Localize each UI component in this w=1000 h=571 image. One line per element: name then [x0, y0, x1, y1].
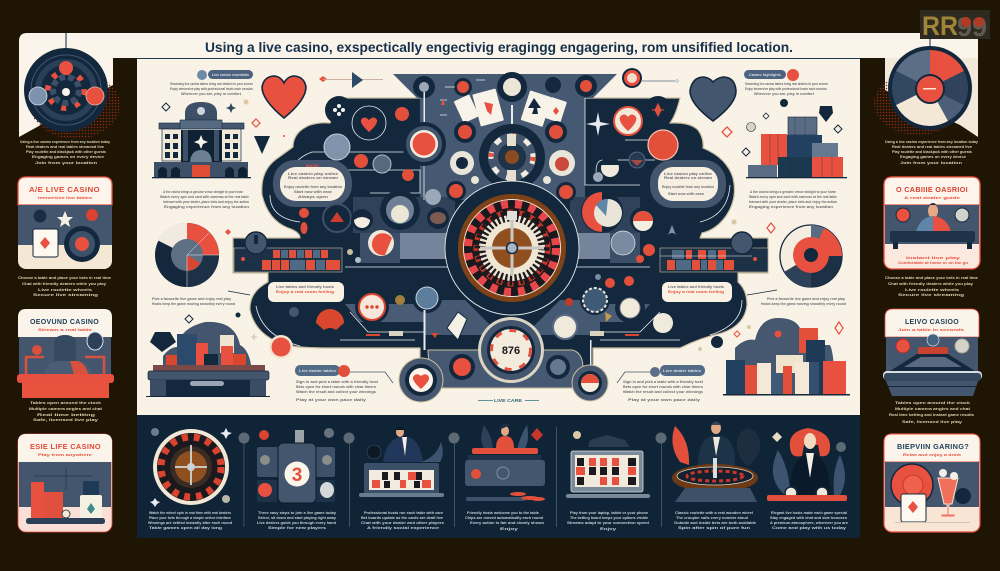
pointer and text right lower: Pick a favourite live game and enjoy real play — [767, 297, 845, 301]
text block right mid: Watch every spin and card with cameras at the real table — [749, 195, 837, 199]
sidebar text: top right: Real dealers and real tables streamed live — [892, 145, 972, 149]
strip captions: Enjoy — [500, 527, 518, 531]
right chip table — [660, 232, 768, 272]
top right pill, heart, node line: Wherever you are, play in comfort — [754, 92, 815, 96]
left text bubble — [273, 160, 352, 207]
sidebar text: right 1 caption — [885, 276, 978, 297]
arrow line — [319, 72, 383, 88]
lower board icons: Live tables and friendly hosts — [276, 285, 334, 289]
sparkles right lower — [698, 322, 843, 351]
lower board icons: Enjoy a real room feeling — [668, 290, 724, 294]
card: left 2 — [17, 309, 114, 398]
slate center panel — [345, 74, 650, 388]
main roulette wheel — [445, 181, 579, 315]
red heart — [262, 76, 306, 118]
top left pill and text: Wherever you are, play in comfort — [181, 92, 242, 96]
bottom navy strip — [137, 415, 860, 538]
header band — [19, 33, 978, 137]
sidebar text: right 2 caption: Tables open around the clock — [895, 401, 970, 405]
top right pill, heart, node line — [622, 68, 828, 121]
sparkles left — [162, 100, 285, 235]
left text bubble: Start now with ease — [294, 190, 332, 194]
sidebar text: top right: Engaging games on every device — [900, 155, 966, 159]
left cloud icons — [324, 96, 414, 181]
lower board icons — [268, 282, 732, 350]
strip captions: Friendly hosts welcome you to the table — [467, 511, 539, 515]
bottom caption: live care: LIVE CARE — [494, 398, 522, 403]
lower left pill and text: Play at your own pace daily — [296, 398, 366, 402]
navy track lines — [256, 98, 742, 346]
text block left mid: A live casino brings a genuine venue straight to your home — [163, 190, 243, 194]
strip captions: Every action is fair and clearly shown — [470, 521, 544, 525]
sidebar text: right 2 caption: Safe, licensed live play — [902, 420, 962, 424]
card: left 3: Play from anywhere — [38, 453, 92, 457]
text block right mid: Interact with your dealer, place bets and enjoy the action — [749, 200, 837, 204]
card: right 1: Instant live play — [906, 256, 960, 260]
card: right 3 — [884, 434, 980, 532]
main board silhouette — [233, 98, 768, 388]
sidebar text: left 1 caption: Live roulette wheels — [38, 288, 92, 292]
strip item: laptop — [566, 431, 650, 498]
sidebar text: right 2 caption: Real time betting and instant game results — [889, 413, 974, 417]
sidebar text: left 1 caption: Secure live streaming — [33, 293, 98, 297]
lower left pill and text: Watch the result and collect your winnings — [296, 390, 376, 394]
strip item: roulette table and host — [672, 422, 782, 502]
text block left mid: Engaging experience from any location — [164, 205, 249, 209]
chip blocks right top — [746, 117, 847, 178]
strip captions: Select, sit down and start playing right away — [258, 516, 336, 520]
card title: OEOVUND CASINO — [30, 319, 99, 326]
left wheel: chip dial — [24, 33, 120, 139]
sidebar text: right 2 caption — [889, 401, 974, 424]
top right pill, heart, node line: Streaming live casino tables bring real dealers to your screen — [745, 82, 828, 86]
sidebar text: right 2 caption: Multiple camera angles and chat — [895, 407, 971, 411]
main cream panel — [137, 59, 860, 415]
sidebar text: left 2 caption: Multiple camera angles and chat — [29, 407, 103, 411]
pointer and text right lower — [747, 290, 846, 306]
left text bubble: Real dealers on stream — [288, 176, 338, 180]
base nodes — [449, 354, 570, 380]
left text bubble: Enjoy roulette from any location — [284, 185, 342, 189]
top left pill and text: Live casino essentials — [212, 73, 249, 77]
card title: O CABIIIE OASRIOI — [896, 187, 968, 194]
text block left mid — [160, 190, 249, 209]
strip captions: Spin after spin of pure fun — [678, 526, 750, 530]
strip captions: Live dealers guide you through every hand — [257, 521, 336, 525]
strip item: dealer and board — [359, 426, 444, 497]
right mid icons — [581, 191, 686, 288]
center chip: 876 — [502, 345, 520, 357]
card: left 1 — [18, 177, 112, 269]
left text bubble: Always open — [298, 195, 328, 199]
card: right 1: Comfortable at home or on the go — [898, 261, 968, 265]
left chip table — [234, 232, 342, 272]
left text bubble: Live casino play online — [288, 172, 338, 176]
strip captions: Classic roulette with a real wooden wheel — [675, 511, 753, 515]
sidebar text: top right: Join from your location — [900, 161, 962, 165]
sidebar text: right 1 caption: Live roulette wheels — [905, 288, 959, 292]
left text bubble: BASE — [306, 164, 319, 168]
strip captions: Outside and inside bets are both available — [674, 521, 756, 525]
strip captions: The croupier calls every number aloud — [676, 516, 748, 520]
lower left pill and text: Bets open for short rounds with clear timers — [296, 385, 376, 389]
top right pill, heart, node line: Casino highlights — [749, 73, 781, 77]
text block right mid: A live casino brings a genuine venue straight to your home — [750, 190, 836, 194]
strip captions: Professional hosts run each table with care — [364, 511, 443, 515]
strip captions: A premium atmosphere, wherever you are — [770, 521, 848, 525]
text block left mid: Watch every spin and card with cameras at the real table — [160, 195, 249, 199]
strip item: red-haired woman — [767, 428, 847, 501]
watermark: RR99: RR — [922, 11, 958, 41]
text block right mid — [749, 190, 837, 209]
sparkles right top — [722, 99, 842, 233]
strip captions: Simple for new players — [268, 526, 326, 530]
strip captions: Come and play with us today — [772, 526, 846, 530]
right text bubble: Live casino play online — [664, 172, 712, 176]
left mid icons — [299, 189, 449, 263]
strip captions: Place your bets through a simple online interface — [149, 516, 231, 520]
strip captions: Chat with your dealer and other players — [361, 521, 444, 525]
sidebar text: left 2 caption: Real time betting — [37, 413, 95, 417]
flag node — [572, 340, 608, 401]
strip captions: Streams adapt to your connection speed — [567, 521, 649, 525]
sidebar text: top left: Join from your location — [35, 161, 97, 165]
sidebar text: top left: Engaging games on every device — [32, 155, 104, 159]
card title: ESIE LIFE CASINO — [30, 444, 101, 451]
right text bubble: Start now with ease — [668, 192, 704, 196]
strip item: woman dealer console — [465, 423, 545, 501]
card: left 2: Stream a real table — [38, 328, 92, 332]
strip captions: Watch the wheel spin in real time with real dealers — [149, 511, 231, 515]
building icon — [152, 102, 251, 178]
right text bubble: Enjoy roulette from any location — [662, 185, 714, 189]
strip captions: Winnings are settled instantly after each round — [148, 521, 232, 525]
card: right 1 — [884, 177, 980, 269]
lower left pill and text: Live dealer tables — [299, 369, 336, 373]
lower right pill and text: Bets open for short rounds with clear timers — [623, 385, 703, 389]
sidebar text: top left: Play roulette and blackjack with other guests — [26, 150, 106, 154]
chip stacks left lower — [146, 322, 270, 397]
sidebar text: right 1 caption: Secure live streaming — [898, 293, 964, 297]
sidebar text: left 1 caption: Choose a table and place your bets in real time — [18, 276, 111, 280]
lower board icons: Live tables and friendly hosts — [668, 285, 724, 289]
lower board icons: Enjoy a real room feeling — [276, 290, 334, 294]
strip captions — [148, 511, 848, 531]
lower right pill and text: Play at your own pace daily — [628, 398, 700, 402]
sidebar text: top left — [20, 140, 110, 165]
right cloud icons — [586, 96, 678, 182]
side nodes around the small wheel — [446, 150, 576, 202]
strip captions: Elegant live hosts make each game special — [771, 511, 847, 515]
sidebar text: top right: Play roulette and blackjack with other guests — [892, 150, 972, 154]
strip dividers — [238, 427, 666, 527]
strip captions: The betting board keeps your options visible — [570, 516, 648, 520]
right wheel: segmented dial — [874, 33, 972, 135]
sidebar text: right 1 caption: Choose a table and place your bets in real time — [885, 276, 978, 280]
lower right pill and text: Watch the result and collect your winnings — [623, 390, 703, 394]
donut chart right — [780, 225, 842, 287]
chip stacks right lower — [723, 318, 850, 396]
pointer and text left lower: Pick a favourite live game and enjoy real play — [152, 297, 231, 301]
top-row nodes and cards — [413, 72, 597, 143]
bottom caption: live care — [478, 398, 539, 403]
card: right 2 — [883, 309, 982, 396]
sparkles left lower — [185, 312, 293, 359]
strip captions: Table games open all day long — [149, 526, 222, 530]
sidebar text: top left: Using a live casino experience from any location today — [20, 140, 110, 144]
sidebar text: left 2 caption: Tables open around the clock — [30, 401, 101, 405]
card: left 3 — [18, 434, 112, 532]
lower right pill and text: Live dealer tables — [663, 369, 701, 373]
strip captions: Play from your laptop, tablet or your phone — [570, 511, 648, 515]
small roulette wheel — [479, 124, 545, 190]
sidebar text: top right — [885, 140, 978, 165]
strip captions: A friendly social experience — [367, 526, 439, 530]
lower left pill and text — [295, 365, 393, 402]
card title: A/E LIVE CASINO — [29, 187, 100, 194]
strip captions: Three easy steps to join a live game today — [258, 511, 336, 515]
card: right 2: Join a table in seconds — [898, 328, 964, 332]
strip item: roulette — [150, 428, 232, 507]
center chip — [478, 317, 544, 383]
watermark: RR99: 99 — [957, 12, 987, 42]
top left pill and text: Enjoy immersive play with professional hosts each session — [170, 87, 253, 91]
lower left pill and text: Sign in and pick a table with a friendly host — [296, 380, 379, 384]
lower right pill and text — [617, 365, 705, 402]
text block left mid: Interact with your dealer, place bets and enjoy the action — [163, 200, 249, 204]
strip captions: Bet boards update as the cards are dealt live — [361, 516, 443, 520]
card: right 1: A real dealer guide — [904, 196, 960, 200]
right text bubble: Real dealers on stream — [664, 176, 712, 180]
top left pill and text: Streaming live casino tables bring real dealers to your screen — [170, 82, 253, 86]
pie chart left — [155, 223, 219, 287]
sidebar text: right 1 caption: Chat with friendly dealers while you play — [888, 282, 973, 286]
title: Using a live casino, exspectically engectivig eragingg engagering, rom unsifified location. — [205, 39, 793, 55]
strip item: number machine: 3 — [292, 465, 302, 486]
card: left 1: Immersive live tables — [38, 196, 92, 200]
right text bubble — [650, 160, 726, 208]
watermark: RR99 — [920, 10, 990, 42]
sidebar text: left 2 caption: Safe, licensed live play — [33, 418, 98, 422]
sidebar text: top right: Using a live casino experience from any location today — [885, 140, 978, 144]
card: right 3: Relax and enjoy a drink — [903, 453, 961, 457]
pointer and text left lower — [152, 291, 250, 306]
sidebar text: top left: Real dealers and real tables streamed live — [26, 145, 104, 149]
strip captions: Stay engaged with chat and side bonuses — [770, 516, 847, 520]
big red ring node — [402, 92, 446, 166]
sidebar text: left 1 caption: Chat with friendly dealers while you play — [22, 282, 106, 286]
sidebar text: left 2 caption — [29, 401, 103, 422]
strip captions: Chips are moved automatically each round — [465, 516, 543, 520]
strip captions: Enjoy — [600, 527, 616, 531]
top left pill and text — [170, 70, 253, 96]
pointer and text left lower: Hosts keep the game moving smoothly every round — [152, 302, 235, 306]
top right pill, heart, node line: Enjoy immersive play with professional hosts each session — [745, 87, 827, 91]
sidebar text: left 1 caption — [18, 276, 111, 297]
card title: BIEPVIIN GARING? — [897, 444, 969, 451]
card title: LEIVO CASIOO — [905, 319, 959, 326]
heart node — [399, 358, 443, 402]
pointer and text right lower: Hosts keep the game moving smoothly every round — [761, 302, 846, 306]
strip item: number machine — [257, 428, 335, 503]
text block right mid: Engaging experience from any location — [749, 205, 833, 209]
lower right pill and text: Sign in and pick a table with a friendly host — [623, 380, 704, 384]
